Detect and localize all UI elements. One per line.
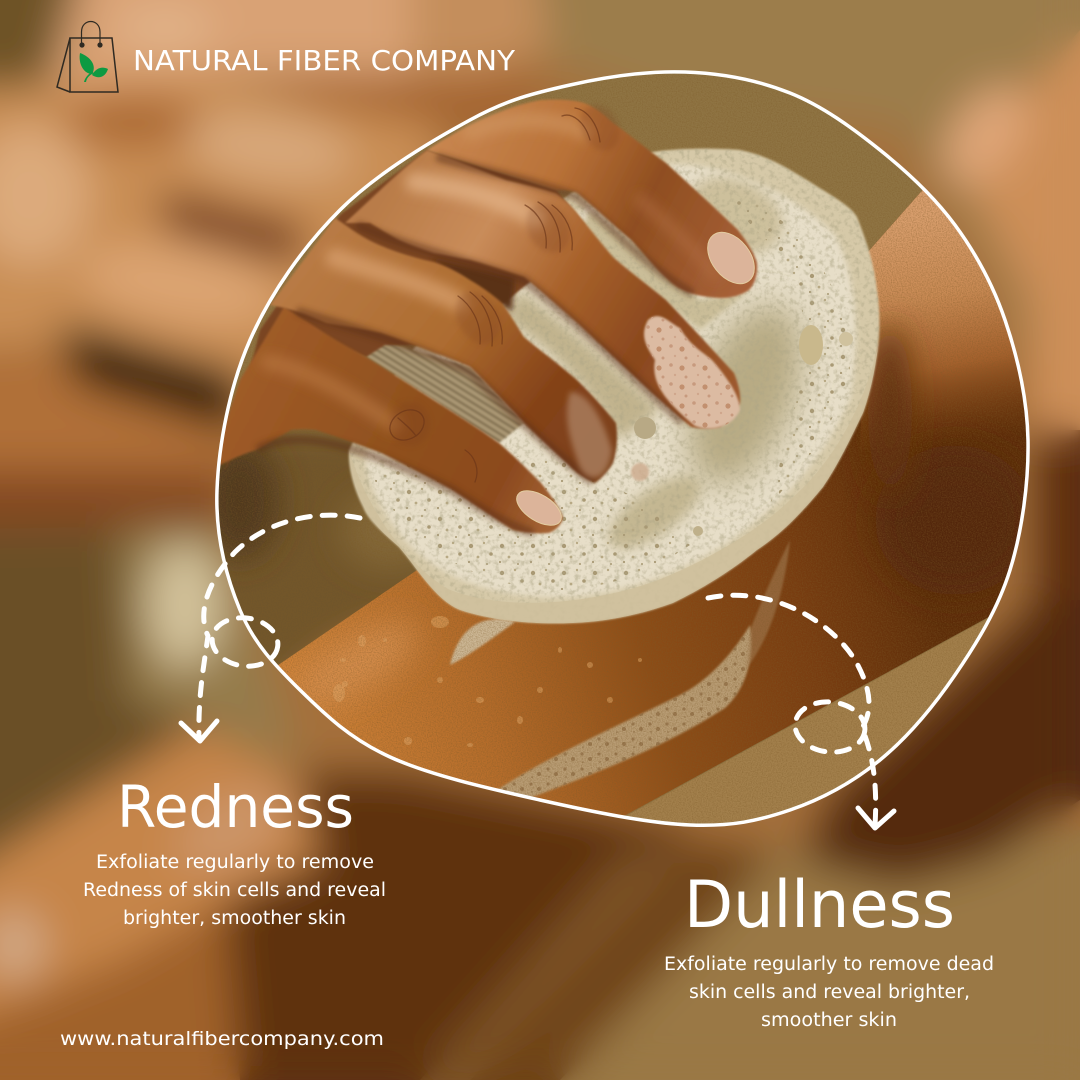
dullness description: smoother skin (761, 1010, 897, 1031)
finger 1 (427, 100, 757, 298)
knuckle shading (392, 106, 618, 432)
foam on fingertips (567, 316, 740, 481)
icon: leaves (80, 53, 108, 82)
dullness description (664, 954, 994, 1031)
foam streak on arm (450, 540, 790, 800)
sharp photo inside organic circle (200, 70, 1040, 852)
palm and finger shadows (225, 150, 585, 470)
finger highlights (268, 120, 715, 425)
heading: dullness: Dullness (684, 868, 955, 943)
dullness description: Exfoliate regularly to remove dead (664, 954, 994, 975)
redness description (83, 852, 386, 929)
sponge (340, 140, 890, 630)
fingernails (511, 223, 764, 532)
elastic strap (366, 340, 524, 443)
finger 4 (210, 307, 563, 533)
logo: shopping bag with leaves (57, 22, 118, 92)
studio backdrop (218, 74, 988, 816)
redness description: Redness of skin cells and reveal (83, 880, 386, 901)
finger underside shading (260, 158, 690, 532)
dullness description: skin cells and reveal brighter, (689, 982, 970, 1003)
tan surface below the arm (626, 619, 988, 824)
dashed arrow: dullness (708, 595, 894, 828)
organic circle outline (217, 72, 1028, 825)
arm (278, 190, 1026, 816)
knuckle wrinkles (384, 108, 600, 482)
redness description: brighter, smoother skin (123, 908, 346, 929)
dashed arrow: redness (181, 515, 360, 741)
finger 2 (345, 150, 740, 428)
brand name: NATURAL FIBER COMPANY (133, 45, 515, 77)
finger 3 (270, 218, 617, 483)
redness description: Exfoliate regularly to remove (96, 852, 374, 873)
hand (210, 98, 764, 533)
water droplets (333, 616, 642, 747)
website url: www.naturalfibercompany.com (60, 1028, 384, 1050)
heading: redness: Redness (117, 773, 354, 841)
